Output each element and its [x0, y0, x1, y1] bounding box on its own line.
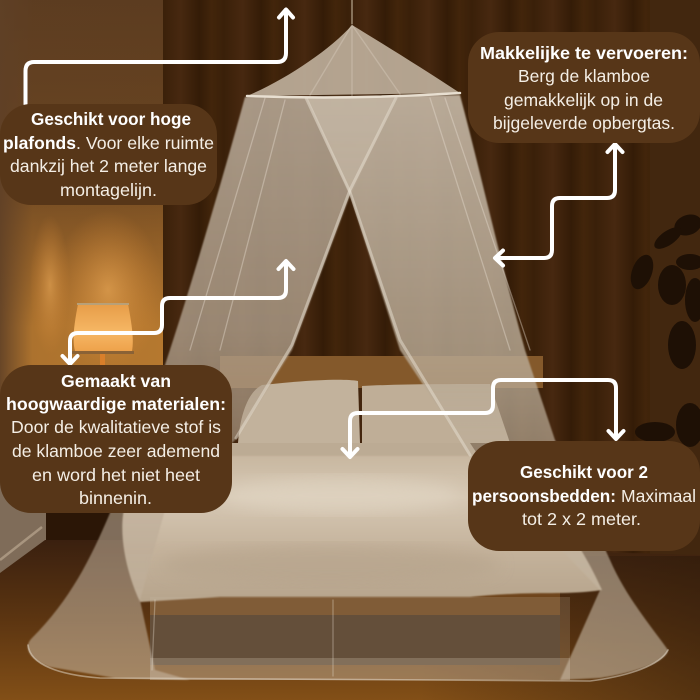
callout: high-quality materials: hoogwaardige materialen:: [6, 394, 226, 414]
callout: double beds: Maximaal: [621, 486, 696, 506]
callout: double beds: Geschikt voor 2: [520, 462, 648, 482]
net: front veil: [150, 597, 570, 680]
net: right panel: [306, 95, 668, 680]
arrow: double beds: [342, 380, 624, 457]
callout: high ceilings: dankzij het 2 meter lange: [10, 156, 207, 176]
callout: high-quality materials: Gemaakt van: [61, 371, 171, 391]
callout: easy to transport: Makkelijke te vervoeren:: [480, 43, 688, 63]
net: canopy cone: [247, 25, 460, 96]
callout: easy to transport: Berg de klamboe: [518, 66, 650, 86]
lamp: [70, 303, 134, 366]
callout: easy to transport: [468, 32, 700, 143]
callout: high-quality materials: en word het niet heet: [32, 465, 200, 485]
callout: double beds: tot 2 x 2 meter.: [522, 509, 641, 529]
callout: high-quality materials: [0, 365, 232, 513]
bed: [122, 356, 602, 665]
arrow: transport: [495, 144, 622, 266]
arrow: materials: [62, 261, 294, 364]
callout: easy to transport: bijgeleverde opbergtas.: [493, 113, 675, 133]
callout: high ceilings: Geschikt voor hoge: [31, 109, 191, 129]
callout: high-quality materials: de klamboe zeer ademend: [12, 441, 220, 461]
callout: high ceilings: [0, 104, 217, 205]
callout: high ceilings: plafonds: [3, 133, 76, 153]
callout: double beds: persoonsbedden:: [472, 486, 616, 506]
net: left panel: [28, 97, 396, 680]
net: hanging cord: [351, 0, 353, 24]
callout: high-quality materials: binnenin.: [79, 488, 152, 508]
arrow: high ceilings: [26, 10, 293, 104]
callout: double beds: [468, 441, 700, 551]
callout: high ceilings: montagelijn.: [60, 180, 157, 200]
callout: high ceilings: . Voor elke ruimte: [76, 133, 214, 153]
callout: high-quality materials: Door de kwalitatieve stof is: [11, 417, 221, 437]
callout: easy to transport: gemakkelijk op in de: [504, 90, 663, 110]
plant silhouette: [626, 211, 700, 447]
